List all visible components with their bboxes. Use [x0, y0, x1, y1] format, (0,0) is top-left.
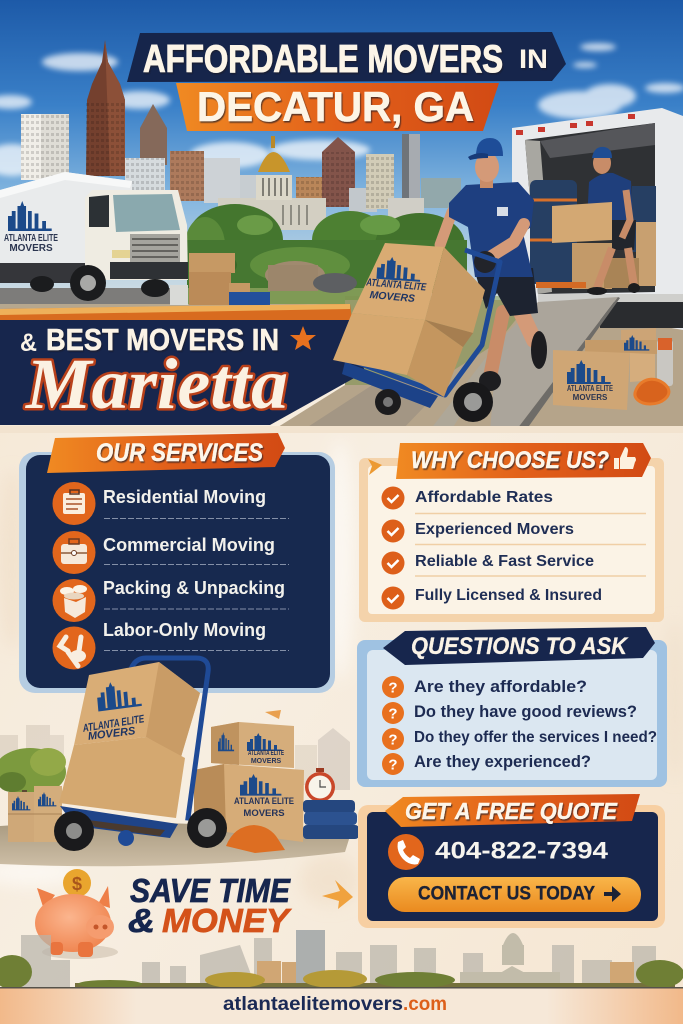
star: [290, 326, 316, 350]
service: labor-only moving: Labor-Only Moving: [103, 620, 266, 640]
bottom city skyline: [0, 930, 683, 989]
illustration: orange straps: [226, 825, 285, 853]
title banner: affordable movers: IN: [519, 44, 548, 74]
shorts: [475, 268, 538, 316]
logo on truck: [8, 201, 52, 231]
loose boxes bottom right: [553, 328, 673, 410]
hand truck: [342, 250, 500, 422]
coin: $: [72, 874, 82, 894]
city skyline: [21, 40, 461, 220]
orange strip above banner: [0, 304, 352, 320]
moving truck left: MOVERS: [9, 243, 53, 254]
service: labor-only moving: [52, 620, 266, 670]
heading banner: why choose us: [396, 443, 651, 479]
footer bar: .com: [403, 994, 447, 1015]
tree line: [0, 955, 683, 989]
service: packing and unpacking: Packing & Unpacking: [103, 578, 285, 598]
item: reliable and fast service: Reliable & Fast Service: [415, 553, 594, 570]
clouds: [0, 43, 683, 176]
boxes on hand truck: MOVERS: [87, 725, 137, 743]
question: experienced: Are they experienced?: [414, 752, 591, 771]
question: services: Do they offer the services I need?: [414, 729, 657, 746]
title banner: decatur ga: DECATUR, GA: [197, 83, 474, 130]
footer bar: [0, 987, 683, 1024]
ground area: [270, 300, 683, 432]
interior boxes: [572, 243, 612, 289]
save time and money: MONEY: [162, 902, 292, 939]
illustration: loaded hand truck: [54, 658, 227, 851]
question: experienced: ?: [388, 756, 398, 774]
panel: our services: [19, 433, 335, 693]
item: experienced movers: [382, 520, 574, 542]
phone number: 404-822-7394: [435, 838, 609, 864]
left arm: [440, 212, 452, 245]
panel: questions to ask: [357, 627, 667, 787]
illustration: stacked boxes right: MOVERS: [243, 808, 285, 819]
item: fully licensed and insured: Fully Licensed & Insured: [415, 587, 602, 604]
contact button: [388, 877, 641, 912]
item: affordable rates: [382, 486, 553, 510]
illustration: stacked boxes right: MOVERS: [251, 758, 281, 765]
service: commercial moving: [52, 531, 275, 574]
question: affordable: [382, 676, 587, 698]
box carried by second mover: [552, 202, 612, 243]
main mover with hand truck: [333, 138, 547, 422]
road: [0, 288, 380, 312]
item: experienced movers: Experienced Movers: [415, 521, 574, 538]
blue wrapped furniture: [530, 180, 577, 284]
loose boxes bottom right: MOVERS: [573, 393, 608, 402]
icon: orange arrow: [368, 459, 382, 475]
icon: arrow: [604, 886, 621, 902]
service: residential moving: [52, 482, 266, 525]
item: affordable rates: Affordable Rates: [415, 489, 553, 506]
illustration: faded background city: [0, 725, 350, 790]
icon: small paper plane: [265, 710, 281, 719]
icon: pointing arrow: [322, 880, 353, 909]
illustration: alarm clock: [305, 768, 335, 802]
moving truck right: [512, 108, 683, 330]
contact button: CONTACT US TODAY: [418, 884, 595, 904]
marietta banner: BEST MOVERS IN: [46, 322, 279, 357]
illustration: blue moving blankets: [303, 800, 359, 839]
neck and head: [480, 176, 493, 188]
box logo: [376, 256, 422, 282]
panel: get a free quote: [358, 794, 665, 928]
save time and money: [128, 872, 292, 939]
back leg: [491, 312, 503, 372]
park trees: [185, 204, 467, 293]
loading ramp: [490, 297, 618, 433]
item: fully licensed and insured: [382, 586, 602, 610]
second mover: [587, 147, 640, 295]
moving truck left: [0, 172, 188, 301]
and best movers in text: &: [20, 329, 37, 357]
box logo: [96, 678, 142, 711]
title banner: affordable movers: AFFORDABLE MOVERS: [143, 38, 503, 81]
service: packing and unpacking: [52, 578, 285, 622]
stacked boxes on hand truck: [333, 243, 485, 397]
boxes on hand truck: [59, 662, 200, 818]
lower paper texture: [0, 440, 683, 906]
website url: atlantaelitemovers: [223, 994, 403, 1015]
heading banner: our services: OUR SERVICES: [96, 439, 263, 467]
stacked boxes on hand truck: ATLANTA ELITE: [365, 276, 427, 294]
icon: phone: [388, 834, 424, 870]
illustration: ground: [0, 822, 350, 866]
small capitol: [460, 933, 560, 986]
heading banner: questions to ask: [383, 627, 655, 665]
question: services: ?: [388, 732, 398, 748]
question: services: [382, 728, 657, 750]
heading banner: questions to ask: QUESTIONS TO ASK: [411, 633, 629, 660]
marietta script: Marietta: [25, 344, 288, 424]
item: reliable and fast service: [382, 552, 594, 574]
cap: [476, 138, 503, 156]
illustration: stacked boxes right: ATLANTA ELITE: [248, 748, 284, 757]
marietta banner: [0, 320, 365, 425]
front leg: [520, 310, 534, 340]
capitol building: [218, 136, 326, 230]
right arm: [490, 224, 524, 257]
service: commercial moving: Commercial Moving: [103, 535, 275, 555]
glove: [474, 251, 496, 273]
icon: piggy bank: [35, 869, 118, 959]
loose boxes bottom right: ATLANTA ELITE: [567, 384, 613, 393]
heading banner: free quote: [385, 794, 640, 827]
question: reviews: ?: [388, 706, 398, 722]
heading banner: free quote: GET A FREE QUOTE: [405, 798, 618, 824]
panel: why choose us: [359, 443, 664, 622]
question: affordable: ?: [388, 680, 398, 696]
boxes on hand truck: ATLANTA ELITE: [81, 713, 146, 735]
question: experienced: [382, 752, 591, 775]
illustration: left boxes: [8, 786, 62, 842]
moving truck left: ATLANTA ELITE: [4, 233, 58, 244]
save time and money: &: [128, 902, 155, 939]
illustration: tree: [0, 748, 66, 812]
service: residential moving: Residential Moving: [103, 487, 266, 507]
illustration: stacked boxes right: [194, 722, 304, 842]
hero photo scene: [0, 0, 683, 432]
illustration: stacked boxes right: ATLANTA ELITE: [234, 796, 294, 807]
shirt: [449, 182, 534, 277]
stacked boxes on hand truck: MOVERS: [369, 289, 415, 305]
question: affordable: Are they affordable?: [414, 677, 587, 696]
question: reviews: Do they have good reviews?: [414, 702, 637, 721]
icon: thumbs up: [614, 447, 636, 469]
heading banner: why choose us: WHY CHOOSE US?: [411, 447, 609, 474]
sky: [0, 0, 683, 300]
stacked boxes beside truck: [170, 253, 357, 305]
heading banner: our services: [47, 433, 285, 473]
save time and money: SAVE TIME: [130, 872, 291, 909]
